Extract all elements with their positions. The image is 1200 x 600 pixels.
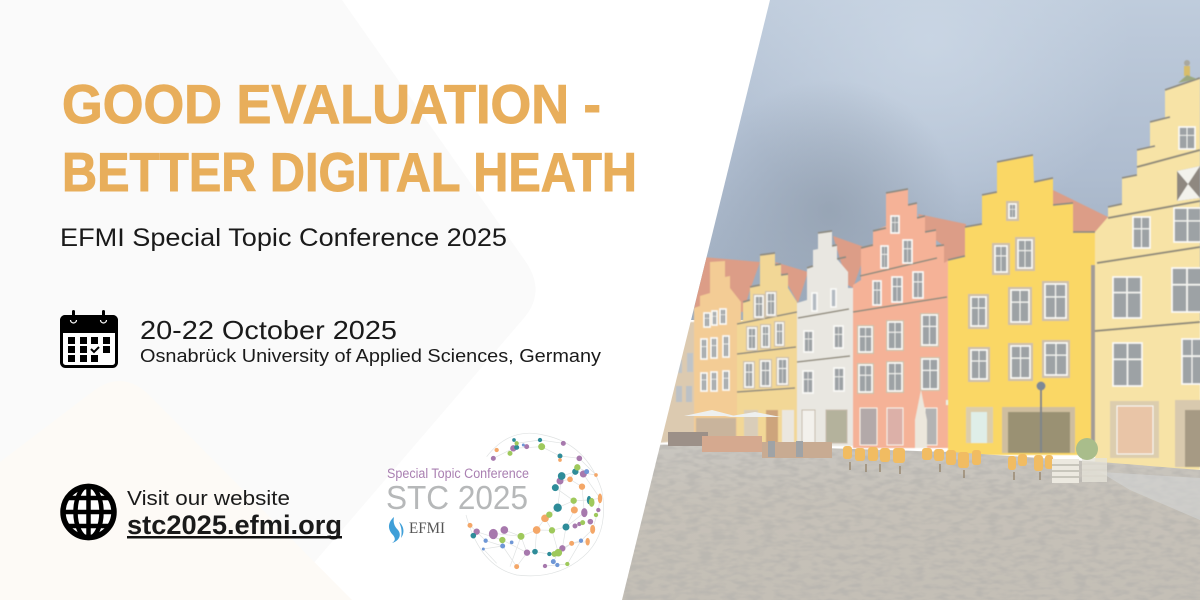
planter boxes: [1052, 438, 1107, 483]
icon: globe: [63, 486, 114, 538]
cobblestone ground: [620, 444, 1200, 600]
date and venue: 20-22 October 2025: [140, 315, 397, 345]
logo: EFMI swoosh: [389, 517, 403, 543]
logo: STC 2025: STC 2025: [386, 479, 528, 516]
cafe chairs: [843, 446, 1053, 480]
logo: STC 2025: EFMI: [409, 520, 445, 537]
title: GOOD EVALUATION -: [62, 73, 601, 135]
background shape: large grey rounded form: [0, 0, 536, 600]
cafe seating on the left: [668, 432, 832, 458]
logo: STC 2025: [386, 433, 604, 576]
website call to action: [127, 487, 342, 540]
tan yellow house: [737, 253, 797, 446]
red roofs: [694, 190, 1108, 312]
pink house: [853, 189, 958, 448]
ornament on gable: [1178, 60, 1197, 83]
title: BETTER DIGITAL HEATH: [62, 141, 637, 203]
logo: STC 2025: Special Topic Conference: [387, 466, 529, 481]
title: [62, 73, 637, 203]
cafe awnings: [684, 410, 781, 417]
background shape: cream rounded form: [0, 381, 352, 600]
subtitle: EFMI Special Topic Conference 2025: [60, 224, 507, 252]
far-left tan house: [660, 322, 694, 444]
website call to action: stc2025.efmi.org: [127, 510, 342, 540]
houses row: [630, 60, 1200, 470]
date and venue: Osnabrück University of Applied Sciences, Germany: [140, 345, 602, 366]
icon: calendar: [60, 310, 118, 366]
pale yellow house on right: [1095, 60, 1200, 470]
orange house: [694, 261, 741, 440]
logo sphere network: [466, 433, 604, 576]
white house: [797, 231, 853, 446]
bright yellow house: [948, 155, 1095, 455]
date and venue: [140, 315, 602, 366]
photo: market square with gabled houses: [620, 0, 1200, 600]
sky: [691, 0, 1200, 320]
website call to action: Visit our website: [127, 487, 290, 510]
